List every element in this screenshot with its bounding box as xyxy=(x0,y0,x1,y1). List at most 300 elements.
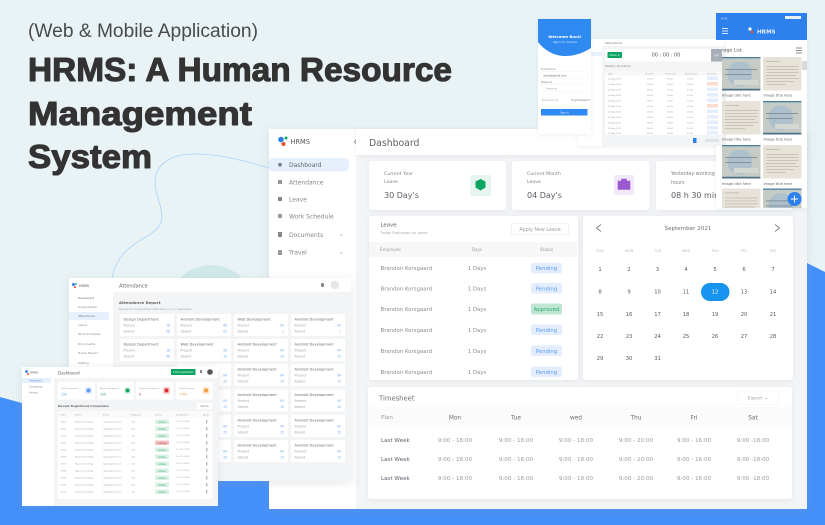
admin table: 141 xyxy=(131,478,136,480)
admin stat cards: 6 xyxy=(139,392,141,396)
attendance web screen: 01:00 xyxy=(687,90,694,92)
panel: leave table: Brandon Korsgaard xyxy=(380,328,432,334)
card: current year leave xyxy=(369,161,506,210)
attendance web screen: 00 : 00 : 00 xyxy=(652,52,680,58)
department cards: Present xyxy=(124,348,136,352)
panel: timesheet: 9:00 -18:00 xyxy=(737,438,770,444)
admin table: Rapto Technology xyxy=(75,462,94,466)
attendance web screen: 18:00 xyxy=(667,128,674,130)
admin table: Rapto Technology xyxy=(75,490,94,494)
department cards: 15 xyxy=(280,430,284,434)
admin table: rapto@gmail.com xyxy=(103,470,121,472)
panel: leave table: Pending xyxy=(536,370,557,376)
panel: calendar: 17 xyxy=(654,312,661,318)
attendance web screen: Check In xyxy=(645,74,655,76)
admin table: #004 xyxy=(60,442,67,444)
attendance web screen: Check Out xyxy=(665,72,676,76)
admin table: Oct 07, 2020 xyxy=(176,448,190,451)
panel: calendar: 13 xyxy=(741,290,747,296)
login phone screen: Sign in to continue xyxy=(553,40,577,44)
department cards: Android Development xyxy=(180,318,220,322)
panel: calendar: 12 xyxy=(712,290,718,296)
attendance sidebar: HRMS xyxy=(79,284,89,288)
attendance header xyxy=(113,278,351,292)
department cards: Android Development xyxy=(294,393,334,397)
panel: timesheet: 9:00 - 16:00 xyxy=(677,438,712,444)
panel: calendar: 26 xyxy=(712,334,718,340)
department cards: Present xyxy=(124,324,136,328)
attendance web screen: 09:00 xyxy=(647,84,654,86)
panel: timesheet: 9:00 - 18:00 xyxy=(499,457,534,463)
panel: leave table: 1 Days xyxy=(468,266,486,272)
department cards: Web Development xyxy=(180,342,214,346)
panel: calendar: FRI xyxy=(741,249,747,253)
mobile image list screen: Image List xyxy=(718,48,742,54)
admin table: 141 xyxy=(131,422,136,424)
attendance web screen: 09:00 xyxy=(647,95,654,97)
panel: timesheet: Timesheet xyxy=(378,394,415,402)
mobile image list screen: HRMS xyxy=(757,30,776,36)
attendance web screen: 18:00 xyxy=(667,100,674,102)
login phone screen: Welcome Back! xyxy=(548,34,582,39)
department cards: Android Development xyxy=(294,418,334,422)
attendance report heading xyxy=(119,300,193,311)
card: yesterday working hours: 08 h 30 min xyxy=(671,191,719,200)
attendance web screen: 20 Aug 2021 xyxy=(608,132,622,135)
attendance web screen xyxy=(578,39,726,146)
admin table: Oct 07, 2020 xyxy=(176,420,190,423)
attendance web screen: 09:00 xyxy=(647,117,654,119)
attendance web screen: 18:00 xyxy=(667,78,674,80)
card: yesterday working hours xyxy=(656,161,793,210)
panel: leave table: Pending xyxy=(536,328,557,334)
department cards: 15 xyxy=(337,380,341,384)
admin table: Active xyxy=(158,435,166,438)
department cards: Present xyxy=(238,450,250,454)
card: yesterday working hours: hours xyxy=(671,180,685,186)
attendance web screen: 20 Aug 2021 xyxy=(608,122,622,124)
panel: leave table: Brandon Korsgaard xyxy=(380,307,432,313)
panel: calendar: 8 xyxy=(598,290,602,296)
admin table: Oct 07, 2020 xyxy=(176,483,190,486)
admin sidebar: Dashboard xyxy=(29,380,42,382)
panel: calendar: SUN xyxy=(596,249,604,253)
attendance web screen: 18:00 xyxy=(667,117,674,119)
panel: timesheet: 9:00 - 18:00 xyxy=(559,457,594,463)
admin sidebar xyxy=(22,367,54,506)
mobile image list screen: Image title here xyxy=(764,94,793,98)
panel: timesheet: 9:00 - 20:00 xyxy=(619,438,654,444)
admin table: Rapto Technology xyxy=(75,442,94,444)
card: current year leave: 30 Day's xyxy=(384,191,419,200)
admin table xyxy=(58,403,212,499)
login phone screen: Remember me xyxy=(542,99,559,102)
department cards: 15 xyxy=(280,456,284,460)
main dashboard screen xyxy=(269,129,807,509)
subtitle: (Web & Mobile Application) xyxy=(28,21,258,42)
panel: calendar: 23 xyxy=(626,334,632,340)
panel: calendar: WED xyxy=(682,249,691,253)
admin stat cards: 150 xyxy=(61,392,67,396)
attendance web screen: 18:00 xyxy=(667,95,674,97)
attendance sidebar: Leave xyxy=(78,323,87,327)
attendance sidebar: Travel Report xyxy=(77,351,99,355)
panel: timesheet: 9:00 -18:00 xyxy=(737,457,770,463)
attendance sidebar: Work Schedule xyxy=(78,332,100,336)
admin sidebar: Admins xyxy=(29,392,39,394)
card: current month leave: Current Month xyxy=(527,171,561,177)
department cards: Absent xyxy=(124,354,135,358)
department cards: 06 xyxy=(223,348,227,352)
admin table: Active xyxy=(158,449,166,452)
panel: timesheet: Sat xyxy=(748,416,758,422)
department cards: 15 xyxy=(337,405,341,409)
attendance web screen: 20 Aug 2021 xyxy=(608,94,622,97)
admin table: 141 xyxy=(131,450,136,452)
login phone screen: name@gmail.com xyxy=(543,74,567,78)
panel: calendar: 25 xyxy=(683,334,689,340)
attendance web screen: 01:00 xyxy=(687,84,694,86)
admin table: Oct 07, 2020 xyxy=(176,462,190,465)
panel: calendar: 7 xyxy=(771,267,775,273)
admin table: #007 xyxy=(60,464,67,466)
panel: leave table: 1 Days xyxy=(468,370,486,376)
admin table: 141 xyxy=(131,492,136,494)
panel: leave table: Brandon Korsgaard xyxy=(380,349,432,355)
blue background shape xyxy=(0,200,825,525)
department cards: Present xyxy=(294,374,307,378)
department cards: 06 xyxy=(166,354,170,358)
panel: calendar: 28 xyxy=(770,334,776,340)
panel: timesheet: 9:00 - 18:00 xyxy=(559,438,594,444)
panel: calendar: 1 xyxy=(598,267,602,273)
admin table: #010 xyxy=(60,484,67,486)
attendance web screen: 09:00 xyxy=(647,106,654,108)
panel: timesheet: 9:00 - 20:00 xyxy=(619,476,654,482)
panel: calendar: 3 xyxy=(656,267,659,273)
admin table: Active xyxy=(158,491,166,494)
panel: calendar: September 2021 xyxy=(665,226,712,232)
department cards: Design Department xyxy=(124,342,159,346)
admin table: rapto@gmail.com xyxy=(103,484,121,486)
department cards: 15 xyxy=(280,380,284,384)
panel: timesheet: 9:00 - 18:00 xyxy=(499,438,534,444)
panel: calendar: 19 xyxy=(712,312,718,318)
panel: calendar: 10 xyxy=(654,290,661,296)
attendance web screen: 01:00 xyxy=(687,106,694,108)
title: System xyxy=(28,138,152,175)
department cards: Absent xyxy=(238,405,249,409)
attendance web screen: 20 Aug 2021 xyxy=(608,88,622,92)
attendance sidebar: Attendance xyxy=(78,314,95,318)
panel: leave table: 1 Days xyxy=(468,286,486,292)
department cards: Present xyxy=(238,348,250,352)
admin table: View All xyxy=(200,405,209,408)
header: Dashboard xyxy=(369,138,420,149)
attendance sidebar: Documents xyxy=(78,342,96,346)
mobile image list screen: Image title here xyxy=(722,94,751,98)
attendance web screen: 09:00 xyxy=(647,133,654,135)
card: current month leave xyxy=(512,161,650,210)
admin table: Rapto Technology xyxy=(75,476,94,480)
attendance web screen: 20 Aug 2021 xyxy=(608,105,622,108)
panel: leave table: Employee xyxy=(380,247,401,252)
department cards: Design Department xyxy=(124,318,159,322)
admin sidebar: Companies xyxy=(29,386,43,388)
sidebar: Work Schedule xyxy=(289,214,334,220)
panel: timesheet: 9:00 - 20:00 xyxy=(619,457,654,463)
department cards: Absent xyxy=(294,456,306,460)
admin table: rapto@gmail.com xyxy=(103,476,121,480)
attendance web screen: 09:00 xyxy=(647,128,654,130)
login phone screen: Password xyxy=(546,88,558,90)
department cards: Present xyxy=(180,374,193,378)
panel: calendar xyxy=(583,216,793,380)
panel: leave table: Brandon Korsgaard xyxy=(380,370,432,376)
panel: leave table xyxy=(369,216,578,380)
teal circle xyxy=(168,265,254,351)
attendance web screen: 20 Aug 2021 xyxy=(608,110,622,114)
admin table: rapto@gmail.com xyxy=(103,448,121,452)
panel: calendar: 22 xyxy=(597,334,603,340)
department cards: Present xyxy=(294,348,307,352)
panel: leave table: 1 Days xyxy=(468,349,486,355)
admin table: Recent Registered Companies xyxy=(58,404,109,408)
admin table: Status xyxy=(155,414,162,416)
card: current year leave: Current Year xyxy=(384,171,413,177)
admin stat cards: 1763 xyxy=(179,392,187,396)
admin table: 141 xyxy=(131,484,136,486)
admin table: #003 xyxy=(60,436,67,438)
admin table: Active xyxy=(158,456,166,459)
department cards xyxy=(120,314,345,462)
sidebar: Leave xyxy=(289,196,307,204)
admin table: rapto@gmail.com xyxy=(103,442,121,444)
panel: timesheet: Tue xyxy=(510,416,521,422)
panel: timesheet xyxy=(368,387,792,499)
admin table: Employee xyxy=(131,414,142,416)
admin table: 141 xyxy=(131,464,136,466)
department cards: Absent xyxy=(124,330,135,334)
panel: calendar: 30 xyxy=(626,356,632,362)
panel: timesheet: 9:00 - 16:00 xyxy=(677,476,712,482)
admin stat cards xyxy=(58,382,212,400)
panel: calendar: 5 xyxy=(713,267,717,273)
panel: leave table: Today Employee on leave xyxy=(380,231,428,235)
department cards: Android Development xyxy=(238,342,277,346)
department cards: 04 xyxy=(337,450,341,454)
attendance report screen xyxy=(69,278,351,481)
attendance web screen: 01:00 xyxy=(687,122,694,124)
attendance web screen: 09:00 xyxy=(647,78,654,80)
attendance sidebar: Organization xyxy=(78,305,97,309)
title: Management xyxy=(28,95,252,132)
department cards: 04 xyxy=(223,424,227,428)
panel: leave table: 1 Days xyxy=(468,328,486,334)
panel: calendar: 29 xyxy=(597,356,603,362)
panel: timesheet: 9:00 - 18:00 xyxy=(438,476,473,482)
attendance sidebar: Dashboard xyxy=(78,296,94,300)
admin table: rapto@gmail.com xyxy=(103,456,121,458)
department cards: 15 xyxy=(223,456,227,460)
header xyxy=(356,129,807,155)
admin table: #008 xyxy=(60,470,67,472)
department cards: Android Development xyxy=(238,368,277,372)
card: current month leave: 04 Day's xyxy=(527,191,562,200)
sidebar: Attendance xyxy=(289,180,324,186)
card: current month leave: Leave xyxy=(527,179,541,185)
panel: leave table: Pending xyxy=(536,286,557,292)
admin header: Dashboard xyxy=(58,370,80,376)
login phone screen: Forgot Password? xyxy=(571,99,591,102)
panel: leave table: Apply New Leave xyxy=(519,227,561,233)
department cards: 15 xyxy=(223,354,227,358)
panel: timesheet: Plan xyxy=(381,415,393,421)
department cards: 04 xyxy=(280,450,284,454)
department cards: Absent xyxy=(238,456,249,460)
panel: calendar: TUE xyxy=(653,249,662,253)
department cards: Web Development xyxy=(238,318,271,322)
department cards: Present xyxy=(238,424,250,428)
panel: calendar: SAT xyxy=(770,249,777,253)
admin table: Email xyxy=(103,414,109,416)
department cards: 06 xyxy=(223,324,227,328)
admin table: Rapto Technology xyxy=(75,448,94,452)
admin table: Oct 07, 2020 xyxy=(176,455,190,458)
attendance report heading: Attendance Report xyxy=(119,300,161,305)
department cards: Android Development xyxy=(238,418,277,422)
admin table: #005 xyxy=(60,450,67,452)
department cards: 04 xyxy=(280,399,284,403)
panel: timesheet: Export xyxy=(748,396,762,402)
sidebar xyxy=(269,129,356,509)
attendance web screen: 18:00 xyxy=(667,90,674,92)
login phone screen: Email Phone xyxy=(541,68,556,71)
panel: leave table: Leave xyxy=(380,222,397,228)
attendance web screen: 18:00 xyxy=(667,106,674,108)
admin table: 141 xyxy=(131,428,136,430)
department cards: 04 xyxy=(223,450,227,454)
mobile image list screen: Image title here xyxy=(722,138,751,142)
admin stat cards: Total Employee xyxy=(179,387,196,390)
department cards: 18 xyxy=(166,348,170,352)
admin stat cards: Active Companies xyxy=(100,387,119,390)
attendance web screen: Check In xyxy=(609,53,621,57)
admin table: Rapto Technology xyxy=(75,434,94,438)
attendance web screen: 20 Aug 2021 xyxy=(608,116,622,119)
department cards: 15 xyxy=(280,405,284,409)
attendance web screen: 01:00 xyxy=(687,117,694,119)
admin table: rapto@gmail.com xyxy=(103,428,121,430)
department cards: Absent xyxy=(238,330,249,334)
admin table: Oct 07, 2020 xyxy=(176,441,190,444)
admin table: rapto@gmail.com xyxy=(103,434,121,438)
panel: calendar: 9 xyxy=(627,290,631,296)
attendance web screen: 01:00 xyxy=(687,78,694,80)
admin table: 141 xyxy=(131,436,136,438)
mobile image list screen: Image title here xyxy=(722,182,751,186)
attendance web screen: 18:00 xyxy=(667,133,674,135)
panel: timesheet: Mon xyxy=(449,416,461,422)
admin table: Rapto Technology xyxy=(75,420,94,424)
login phone screen xyxy=(538,19,591,134)
panel: timesheet: 9:00 - 18:00 xyxy=(559,476,594,482)
department cards: 04 xyxy=(280,324,284,328)
department cards: Absent xyxy=(238,380,249,384)
department cards: Absent xyxy=(294,330,306,334)
panel: timesheet: 9:00 - 16:00 xyxy=(677,457,712,463)
panel: timesheet: wed xyxy=(570,416,582,422)
admin table: #001 xyxy=(60,422,67,424)
admin table: #002 xyxy=(60,428,67,430)
admin table: Oct 07, 2020 xyxy=(176,427,190,430)
admin table: rapto@gmail.com xyxy=(103,490,121,494)
department cards: 15 xyxy=(337,354,341,358)
attendance web screen: 18:00 xyxy=(667,122,674,124)
connector curve xyxy=(112,154,269,278)
admin table: #009 xyxy=(60,478,67,480)
login phone screen: Sign In xyxy=(560,110,569,114)
admin table: S.No xyxy=(60,414,66,416)
attendance web screen: Date xyxy=(608,72,614,76)
panel: calendar: 21 xyxy=(770,312,776,318)
mobile image list screen xyxy=(716,13,807,222)
admin table: Rapto Technology xyxy=(75,470,94,472)
attendance web screen: 01:00 xyxy=(687,133,694,135)
admin table: Name xyxy=(75,414,82,416)
panel: calendar: 31 xyxy=(654,356,661,362)
admin table: 141 xyxy=(131,470,136,472)
panel: calendar: 24 xyxy=(654,334,661,340)
sidebar: Dashboard xyxy=(289,162,322,169)
panel: leave table: Brandon Korsgaard xyxy=(380,286,432,292)
panel: timesheet: 9:00 - 18:00 xyxy=(438,457,473,463)
department cards: Present xyxy=(294,424,307,428)
department cards: Absent xyxy=(294,380,306,384)
department cards: Android Development xyxy=(294,318,334,322)
attendance web screen: Attendance xyxy=(605,41,622,45)
attendance web screen: 20 Aug 2021 xyxy=(608,78,622,80)
admin table: rapto@gmail.com xyxy=(103,462,121,466)
admin table: Rapto Technology xyxy=(75,456,94,458)
panel: timesheet: Fri xyxy=(691,416,698,422)
department cards: Present xyxy=(294,450,307,454)
attendance sidebar xyxy=(69,278,113,481)
attendance web screen: Weekly Overtime xyxy=(605,64,631,68)
panel: leave table: Status xyxy=(540,247,553,252)
department cards: Android Development xyxy=(238,393,277,397)
panel: leave table: Pending xyxy=(536,349,557,355)
department cards: 02 xyxy=(223,330,227,334)
attendance web screen: 01:00 xyxy=(687,100,694,102)
department cards: 04 xyxy=(337,374,341,378)
attendance web screen: 09:00 xyxy=(647,112,654,114)
panel: leave table: Days xyxy=(472,247,482,252)
department cards: 1 xyxy=(339,330,341,334)
department cards: 04 xyxy=(280,424,284,428)
attendance web screen: 01:00 xyxy=(687,112,694,114)
department cards: Present xyxy=(180,324,193,328)
sidebar: Travel xyxy=(288,250,307,256)
admin table: Rapto Technology xyxy=(75,484,94,486)
attendance sidebar: Setting xyxy=(78,361,89,365)
admin table: Rapto Technology xyxy=(75,428,94,430)
admin header: Invite Organization xyxy=(173,371,194,374)
panel: calendar: 20 xyxy=(741,312,747,318)
admin table: #006 xyxy=(60,456,67,458)
panel: timesheet: Last Week xyxy=(381,476,411,482)
panel: leave table: Pending xyxy=(536,266,557,272)
